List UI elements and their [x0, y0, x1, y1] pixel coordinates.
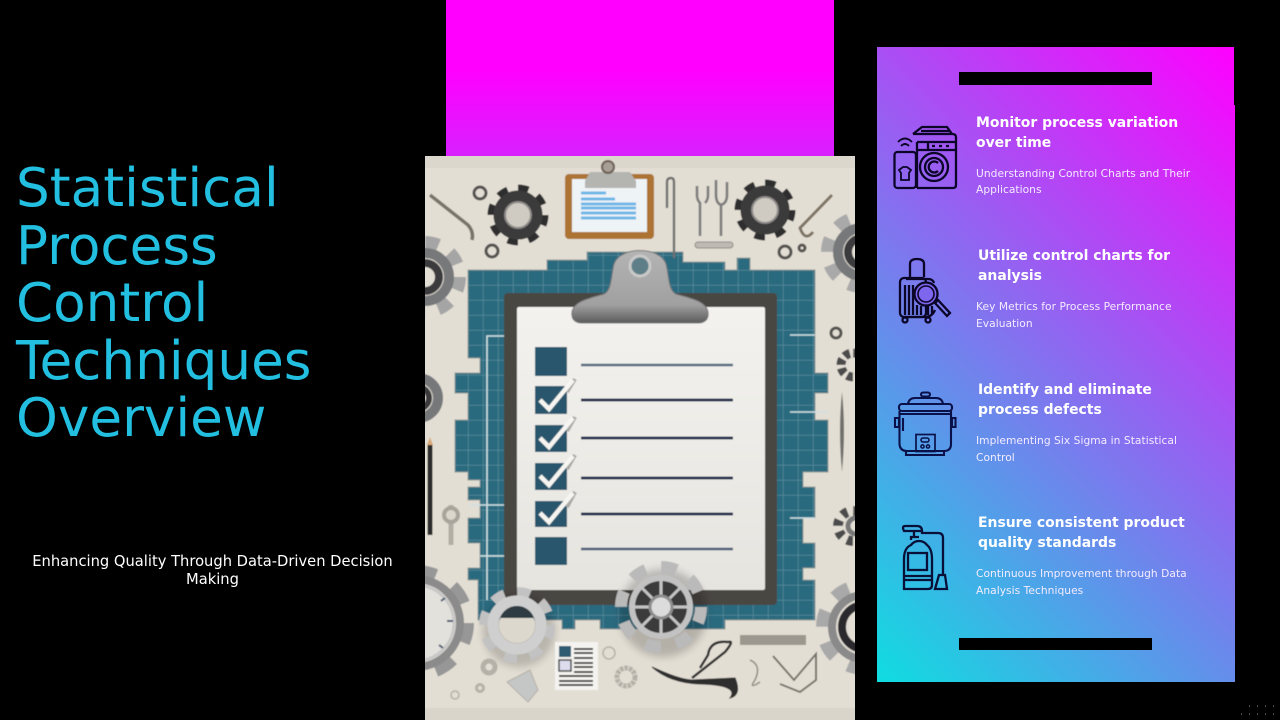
heading 2: Utilize control charts for	[978, 248, 1170, 264]
mini clipboard	[565, 161, 654, 239]
heading 1	[976, 115, 1178, 151]
icon: fire extinguisher	[902, 524, 948, 590]
gradient panel	[877, 47, 1235, 682]
heading 3: Identify and eliminate	[978, 382, 1152, 398]
body 4: Continuous Improvement through Data	[976, 567, 1187, 580]
clock gear	[364, 571, 468, 675]
silver gear	[483, 592, 555, 667]
body 1: Applications	[976, 183, 1042, 196]
small data sheet	[555, 642, 598, 690]
body 4	[976, 567, 1187, 596]
body 2	[976, 300, 1172, 330]
title	[16, 157, 312, 449]
body 2: Evaluation	[976, 316, 1033, 330]
small loop tool	[750, 660, 760, 686]
engraved label	[740, 635, 806, 645]
heading 2	[978, 248, 1170, 284]
wrench left	[430, 195, 472, 240]
subtitle: Enhancing Quality Through Data-Driven Decision	[32, 553, 393, 570]
big gear upper left	[391, 243, 459, 311]
light chart lines on grid	[470, 335, 828, 600]
subtitle: Making	[186, 571, 239, 588]
faint dot grid	[1241, 705, 1274, 715]
small rings	[474, 187, 841, 338]
pencil	[428, 445, 432, 535]
icon: luggage with magnifier	[898, 258, 952, 324]
teal grid backdrop	[455, 252, 828, 629]
magenta backing block	[446, 0, 834, 156]
big gear upper right	[828, 218, 896, 286]
body 3: Implementing Six Sigma in Statistical	[976, 434, 1177, 447]
scissors	[652, 642, 738, 698]
heading 4	[978, 515, 1185, 551]
body 2: Key Metrics for Process Performance	[976, 300, 1172, 313]
spoked gear	[619, 567, 707, 657]
heading 1: over time	[976, 135, 1051, 151]
pencil tip	[427, 437, 433, 445]
body 3: Control	[976, 450, 1015, 464]
small bolt	[448, 505, 454, 545]
subtitle	[32, 553, 393, 588]
body 1	[976, 166, 1190, 196]
clipboard clip	[572, 250, 708, 323]
heading 2: analysis	[978, 268, 1042, 284]
right small gears	[838, 353, 868, 541]
heading 4: quality standards	[978, 535, 1116, 551]
bolt ring	[444, 508, 458, 522]
fork tools	[697, 180, 727, 236]
title: Statistical	[16, 157, 279, 219]
heading 3: process defects	[978, 402, 1102, 418]
small bar tool	[695, 242, 733, 248]
heading 4: Ensure consistent product	[978, 515, 1185, 531]
illustration: checklist clipboard with gears and tools	[425, 156, 855, 720]
pen	[667, 178, 674, 258]
big gear lower right	[822, 585, 906, 669]
body 1: Understanding Control Charts and Their	[976, 166, 1190, 180]
clip hole	[630, 256, 650, 276]
body 3	[976, 434, 1177, 464]
small parts	[451, 647, 635, 702]
heading 3	[978, 382, 1152, 418]
wrench right	[800, 195, 832, 236]
bottom bar	[959, 638, 1152, 650]
title: Process	[16, 214, 218, 276]
right needle tool	[840, 392, 844, 472]
icon: rice cooker	[894, 392, 957, 456]
icon: washer and phone	[893, 126, 958, 190]
title: Techniques	[16, 330, 312, 392]
heading 1: Monitor process variation	[976, 115, 1178, 131]
left mid ring	[398, 378, 438, 418]
clipboard	[504, 250, 777, 605]
checklist rows	[535, 347, 733, 565]
body 4: Analysis Techniques	[976, 584, 1083, 596]
title: Overview	[16, 387, 266, 449]
dark gear left	[493, 190, 543, 240]
top bar	[959, 72, 1152, 85]
dark gear right	[740, 185, 790, 235]
title: Control	[16, 272, 208, 334]
check mark shape	[773, 654, 816, 692]
